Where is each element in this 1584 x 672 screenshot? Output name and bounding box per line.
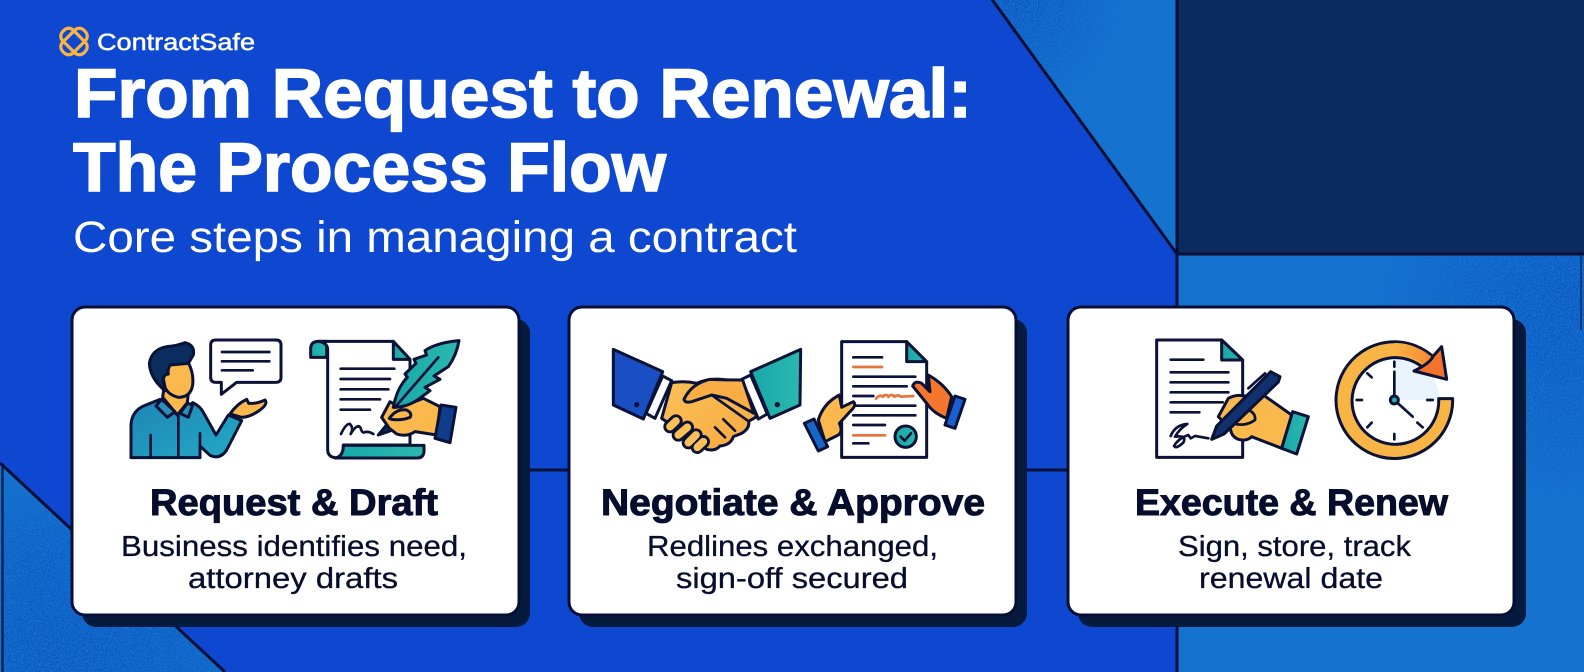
description [1178, 531, 1412, 595]
heading: Execute & Renew [1135, 482, 1448, 523]
description: attorney drafts [188, 563, 398, 595]
icon: clock with renewal arrow [1336, 342, 1453, 458]
icon: signing document with pen [1157, 340, 1308, 457]
description: Business identifies need, [121, 531, 467, 563]
icon: handshake [613, 349, 801, 450]
description: Sign, store, track [1178, 531, 1412, 563]
panel: negotiate and approve [569, 307, 1027, 627]
icon: document with two hands [804, 342, 965, 457]
heading: Request & Draft [150, 482, 438, 523]
fingers [670, 421, 703, 447]
description [121, 531, 467, 595]
logo wordmark: ContractSafe [97, 29, 255, 55]
description: Redlines exchanged, [647, 531, 938, 563]
title [73, 55, 972, 206]
heading: Negotiate & Approve [601, 482, 985, 523]
subtitle: Core steps in managing a contract [73, 213, 797, 262]
description [647, 531, 938, 595]
icon: scroll with quill and hand [311, 341, 459, 458]
description: sign-off secured [676, 563, 908, 595]
panel: execute and renew [1068, 307, 1526, 627]
icon: person with speech bubble [131, 340, 281, 458]
title: From Request to Renewal: [74, 55, 972, 132]
icon: logo knot [58, 26, 90, 57]
title: The Process Flow [73, 129, 666, 206]
description: renewal date [1199, 563, 1383, 595]
panel: request and draft [72, 307, 530, 627]
logo: ContractSafe [58, 26, 255, 57]
